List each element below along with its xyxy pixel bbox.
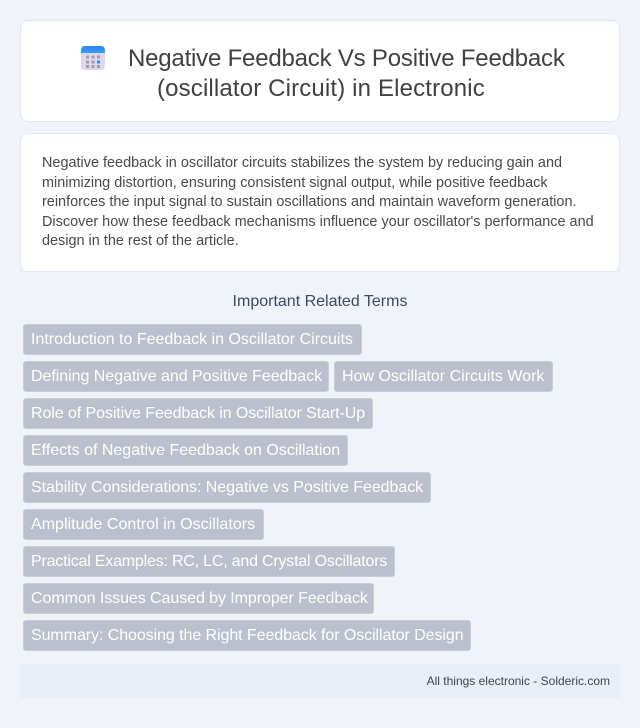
footer credit: All things electronic - Solderic.com [427,674,610,688]
description text: Negative feedback in oscillator circuits stabilizes the system by reducing gain and [42,155,562,171]
tag: Defining Negative and Positive Feedback [31,368,322,385]
panel: description [20,133,620,272]
tag: Common Issues Caused by Improper Feedback [31,590,368,607]
tag: Summary: Choosing the Right Feedback for Oscillator Design [31,627,464,644]
description text: reinforces the input signal to sustain oscillations and maintain waveform generation. [42,194,576,210]
icon: calendar grid [81,46,105,70]
footer [20,664,620,698]
description text: Discover how these feedback mechanisms influence your oscillator's performance and [42,214,594,230]
tag [23,435,348,466]
title: Negative Feedback Vs Positive Feedback [128,45,565,72]
tag: Introduction to Feedback in Oscillator Circuits [31,331,353,348]
tag: Effects of Negative Feedback on Oscillation [31,442,340,459]
tag [334,361,553,392]
tag [23,361,329,392]
tag [23,472,431,503]
tag: How Oscillator Circuits Work [342,368,544,385]
tag [23,583,374,614]
tag [23,398,373,429]
tag [23,324,362,355]
tag: Role of Positive Feedback in Oscillator Start-Up [31,405,365,422]
description text: design in the rest of the article. [42,233,239,249]
panel: title card [20,20,620,122]
description text: minimizing distortion, ensuring consistent signal output, while positive feedback [42,174,548,190]
tag: Amplitude Control in Oscillators [31,516,255,533]
tag [23,546,395,577]
tag: Practical Examples: RC, LC, and Crystal Oscillators [31,553,387,570]
tag [23,509,264,540]
description text [42,155,594,249]
tag: Stability Considerations: Negative vs Positive Feedback [31,479,423,496]
list of related term tags [23,324,553,651]
title: (oscillator Circuit) in Electronic [157,75,485,102]
heading: related terms: Important Related Terms [233,293,407,310]
title [128,45,565,102]
tag [23,620,471,651]
